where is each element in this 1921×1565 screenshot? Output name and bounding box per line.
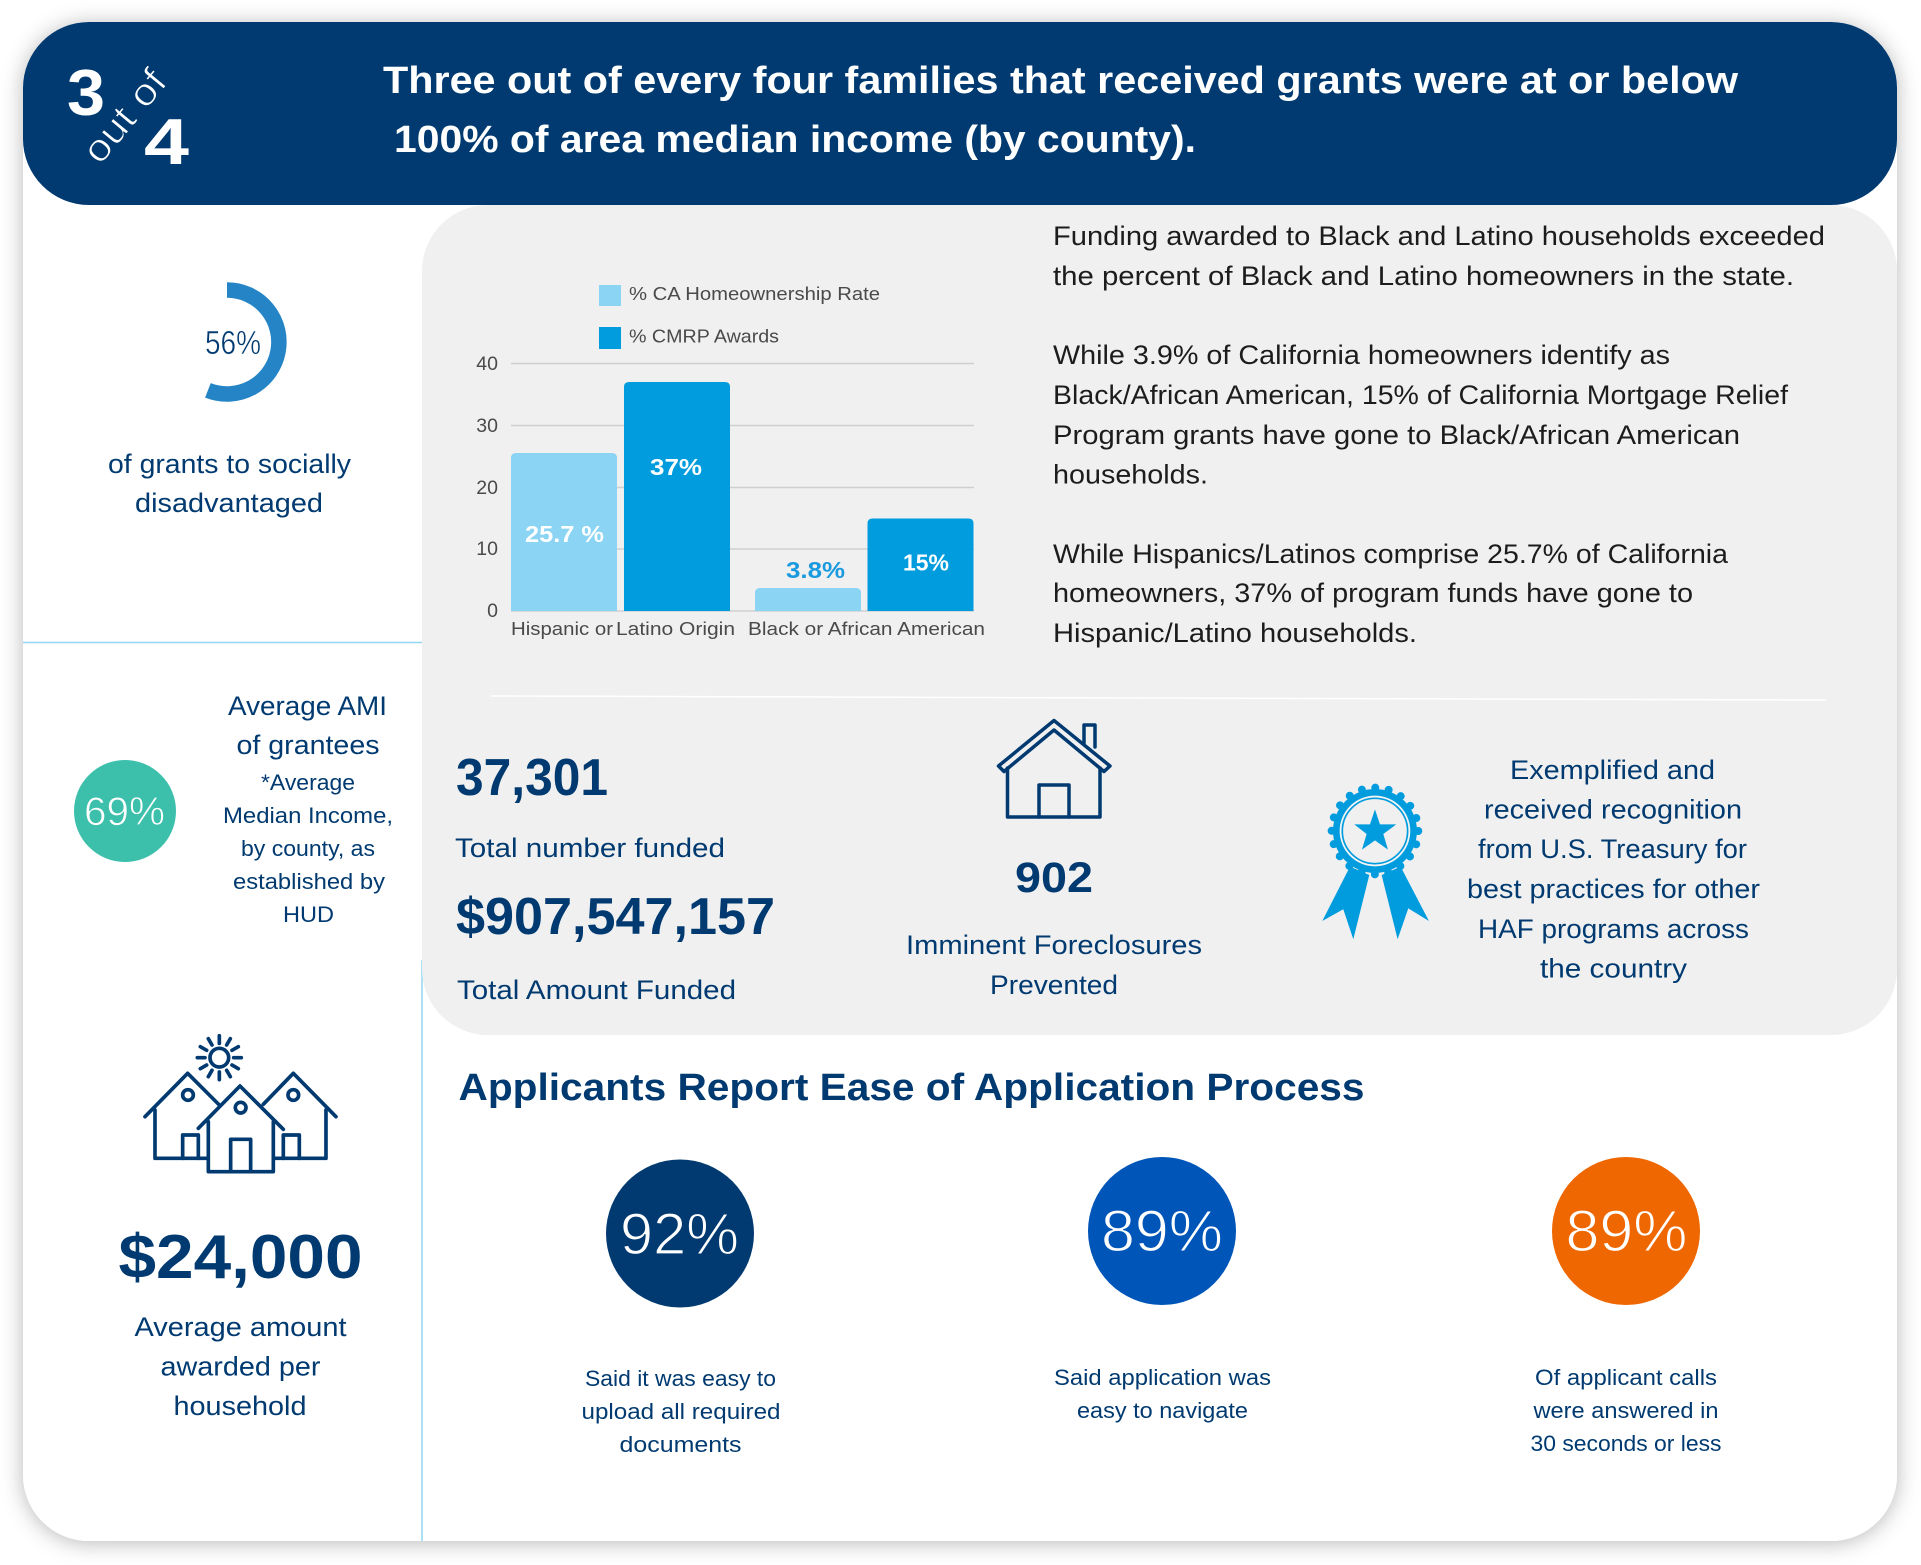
donut chart	[205, 290, 279, 394]
caption: *Average	[261, 770, 355, 795]
caption	[1467, 755, 1760, 984]
caption: by county, as	[241, 836, 375, 861]
icon: 3 out of 4	[67, 56, 189, 178]
caption: 30 seconds or less	[1530, 1431, 1722, 1456]
title: 100% of area median income (by county).	[394, 119, 1196, 161]
bar value labels: 25.7 %	[525, 521, 604, 547]
caption	[223, 691, 393, 927]
x axis labels: Hispanic or	[511, 619, 613, 639]
heading: ease of application: Applicants Report Ease of Application Process	[458, 1067, 1364, 1109]
icon: award ribbon	[1322, 788, 1429, 939]
stat: average award	[118, 1036, 362, 1421]
caption	[1054, 1365, 1271, 1423]
header banner	[23, 22, 1897, 205]
text block: funding narrative: Hispanic/Latino households.	[1053, 618, 1417, 648]
caption	[906, 930, 1202, 1000]
stat: totals funded: Total number funded	[455, 833, 725, 863]
bars	[511, 382, 974, 611]
circle 92%	[606, 1160, 754, 1308]
x axis labels: Black or African American	[748, 619, 985, 639]
caption: Said application was	[1054, 1365, 1271, 1390]
number: 902	[1015, 854, 1093, 902]
stat: average AMI 69%	[74, 691, 393, 927]
number: $24,000	[118, 1223, 362, 1292]
caption: were answered in	[1532, 1398, 1718, 1423]
caption: Of applicant calls	[1535, 1365, 1717, 1390]
caption: Said it was easy to	[585, 1366, 776, 1391]
stat: 56% of grants to socially disadvantaged	[108, 290, 352, 518]
icon: 3 out of 4: out of	[75, 61, 176, 172]
caption	[582, 1366, 780, 1457]
y axis labels: 30	[476, 415, 498, 437]
caption: awarded per	[160, 1352, 320, 1382]
y axis labels	[476, 353, 498, 622]
caption: Median Income,	[223, 803, 393, 828]
caption: Exemplified and	[1510, 755, 1715, 785]
text block: funding narrative: homeowners, 37% of program funds have gone to	[1053, 578, 1693, 608]
title	[383, 60, 1738, 161]
caption: documents	[620, 1432, 742, 1457]
title: Three out of every four families that received grants were at or below	[383, 60, 1738, 102]
bar value labels: 3.8%	[786, 557, 845, 583]
stat: foreclosures prevented	[906, 720, 1202, 1000]
text block: funding narrative: Program grants have gone to Black/African American	[1053, 420, 1740, 450]
caption: HAF programs across	[1478, 914, 1749, 944]
caption: Prevented	[990, 970, 1118, 1000]
caption	[1530, 1365, 1722, 1456]
icon: house	[998, 720, 1110, 817]
x axis labels: Latino Origin	[616, 619, 735, 639]
text block: funding narrative: households.	[1053, 460, 1208, 490]
stat: totals funded: 37,301	[456, 749, 608, 807]
caption: from U.S. Treasury for	[1478, 834, 1747, 864]
legend	[599, 284, 880, 349]
caption: household	[174, 1391, 306, 1421]
circle 92%: 92%	[620, 1202, 739, 1267]
caption	[108, 449, 352, 518]
left column divider	[23, 642, 422, 644]
icon: 3 out of 4: 3	[67, 56, 105, 129]
icon: teal circle: 69%	[84, 790, 165, 834]
stat: totals funded	[455, 749, 775, 1005]
text block: funding narrative: While Hispanics/Latinos comprise 25.7% of California	[1053, 539, 1729, 569]
legend: % CMRP Awards	[629, 326, 779, 346]
circle 89% orange	[1552, 1157, 1700, 1305]
stat: totals funded: $907,547,157	[456, 888, 775, 946]
text block: funding narrative: Funding awarded to Black and Latino households exceeded	[1053, 221, 1825, 251]
text block: funding narrative: While 3.9% of California homeowners identify as	[1053, 340, 1670, 370]
stat: U.S. Treasury recognition	[1322, 755, 1760, 984]
caption: best practices for other	[1467, 874, 1760, 904]
bar value labels	[525, 454, 949, 583]
caption: HUD	[283, 902, 334, 927]
text block: funding narrative	[1053, 221, 1825, 648]
text block: funding narrative: the percent of Black and Latino homeowners in the state.	[1053, 261, 1794, 291]
donut chart: 56%	[205, 324, 261, 361]
caption: Imminent Foreclosures	[906, 930, 1202, 960]
stat: 92% upload	[582, 1160, 780, 1457]
caption: upload all required	[582, 1399, 780, 1424]
circle 89% blue	[1088, 1157, 1236, 1305]
circle 89% orange: 89%	[1566, 1199, 1688, 1264]
caption: the country	[1540, 954, 1688, 984]
y axis labels: 10	[476, 538, 498, 560]
icon: three houses and sun	[145, 1036, 336, 1172]
text block: funding narrative: Black/African American, 15% of California Mortgage Relief	[1053, 380, 1789, 410]
stat: 89% calls answered	[1530, 1157, 1722, 1456]
legend: % CA Homeownership Rate	[629, 284, 880, 304]
panel: grey statistics panel	[422, 205, 1897, 1035]
caption: received recognition	[1484, 794, 1742, 824]
caption: Average AMI	[228, 691, 387, 721]
y axis labels: 40	[476, 353, 498, 375]
caption: easy to navigate	[1077, 1398, 1248, 1423]
caption: Average amount	[134, 1312, 347, 1342]
caption: of grantees	[236, 730, 380, 760]
icon: 3 out of 4: 4	[144, 105, 189, 178]
caption: established by	[233, 869, 385, 894]
stat: totals funded: Total Amount Funded	[457, 975, 736, 1005]
bar value labels: 37%	[650, 454, 702, 480]
stat: 89% navigate	[1054, 1157, 1271, 1423]
caption: of grants to socially	[108, 449, 352, 479]
circle 89% blue: 89%	[1101, 1199, 1223, 1264]
y axis labels: 20	[476, 477, 498, 499]
caption: disadvantaged	[135, 488, 323, 518]
caption	[134, 1312, 347, 1421]
bar chart	[476, 284, 985, 639]
bar value labels: 15%	[903, 550, 949, 576]
icon: teal circle	[74, 760, 176, 862]
y axis labels: 0	[487, 600, 498, 622]
x axis labels	[511, 619, 985, 639]
